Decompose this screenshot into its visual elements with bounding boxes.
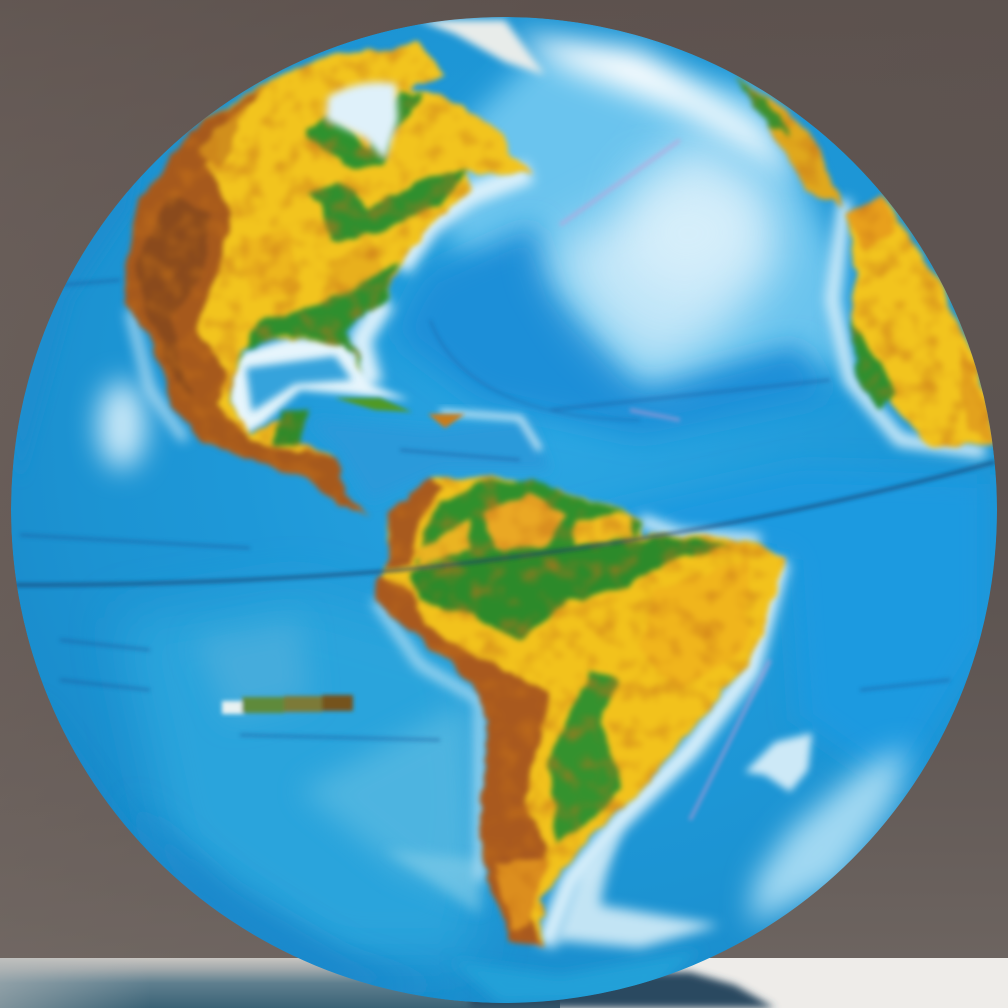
coastal shelf halos <box>130 172 985 945</box>
Gulf of Guinea green <box>850 320 895 408</box>
Africa <box>846 197 998 447</box>
eastern US lowland green <box>235 262 398 372</box>
landmass: South America yellow base <box>375 478 785 948</box>
darker mountain core <box>135 195 210 395</box>
table surface with shadow <box>0 958 1008 1008</box>
landmass: Africa yellow <box>846 197 998 447</box>
Patagonian orange <box>495 858 548 930</box>
South America <box>375 478 785 948</box>
legend colour bar <box>222 695 353 714</box>
glare highlights <box>98 34 908 948</box>
Gran Chaco green <box>550 670 622 842</box>
North America <box>125 45 532 515</box>
Europe coast fragments <box>735 78 842 208</box>
Guiana highlands yellow <box>485 495 565 550</box>
Rocky Mountains brown <box>125 85 372 515</box>
northern green Guiana belt <box>415 480 640 565</box>
Amazon green <box>410 538 730 642</box>
Arctic ice at top <box>418 20 545 75</box>
Canadian shield green <box>308 92 425 168</box>
Andes brown north <box>385 478 445 570</box>
Pink map marks over ocean <box>560 140 770 820</box>
Equator line <box>15 462 995 585</box>
Andes brown central and south <box>375 575 550 948</box>
Africa orange tint <box>846 197 893 250</box>
Mexico south green patch <box>275 410 310 445</box>
landmass: North America yellow base <box>192 37 536 460</box>
Brazilian highlands orange <box>640 560 750 690</box>
Caribbean islands <box>335 398 465 428</box>
Great Lakes green belt <box>305 170 467 240</box>
Hudson Bay <box>326 83 398 160</box>
Tropic and map label streaks <box>20 280 950 740</box>
orange highlands <box>241 230 296 299</box>
Gulf and Caribbean <box>228 338 550 500</box>
